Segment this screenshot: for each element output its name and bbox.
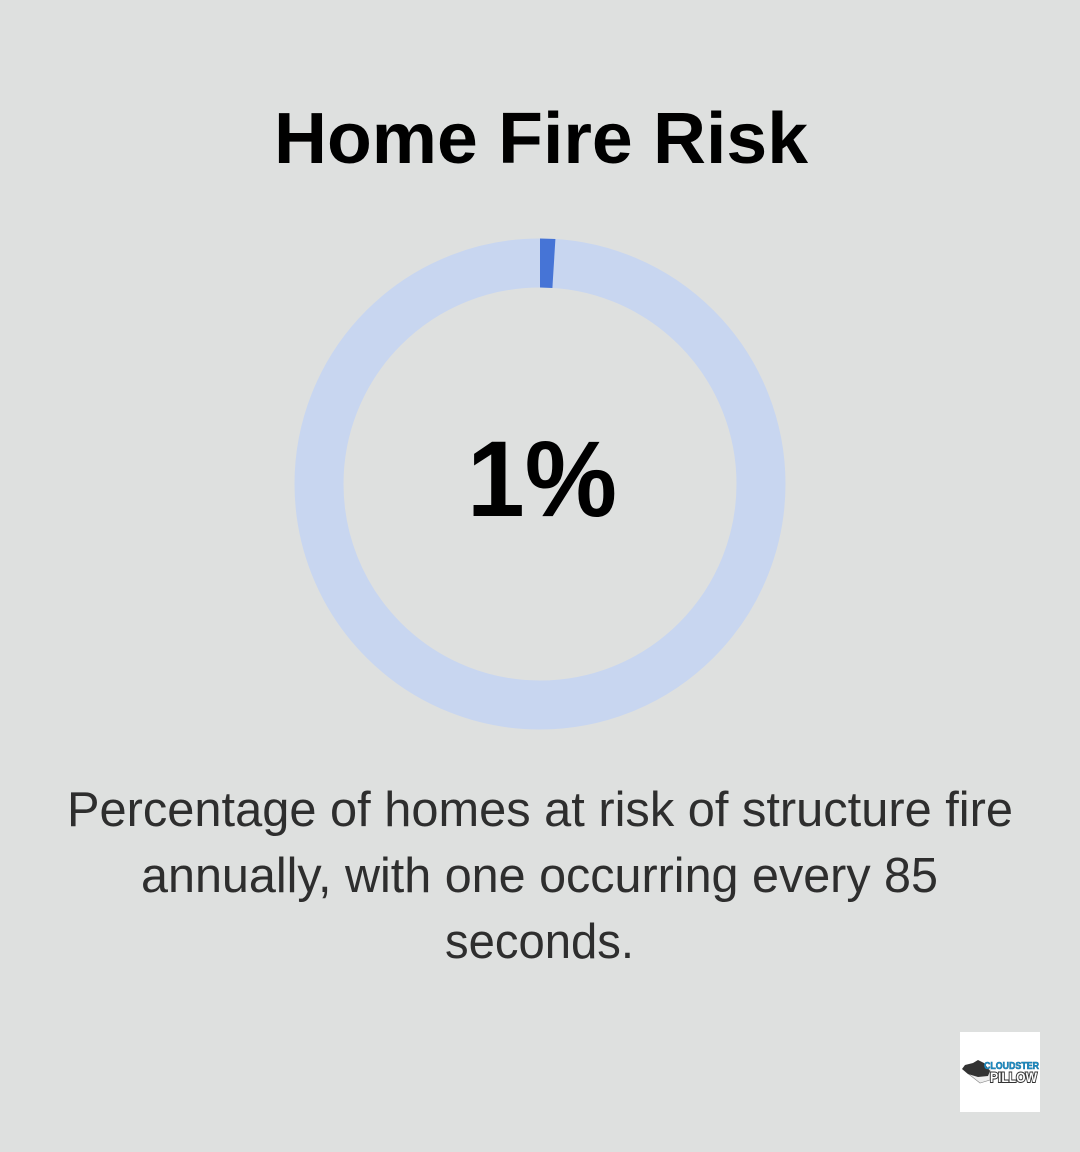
logo text: CLOUDSTER xyxy=(984,1061,1040,1072)
description text: Percentage of homes at risk of structure fire xyxy=(67,783,1013,837)
ring track xyxy=(319,263,761,705)
logo background xyxy=(960,1032,1040,1112)
donut chart: 1 percent xyxy=(319,238,761,705)
center value: 1% xyxy=(467,418,617,539)
logo: Cloudster Pillow: PILLOW xyxy=(990,1069,1038,1085)
logo: Cloudster Pillow xyxy=(960,1032,1040,1112)
title: Home Fire Risk xyxy=(274,99,809,179)
description text: seconds. xyxy=(445,915,634,969)
description text: annually, with one occurring every 85 xyxy=(141,849,938,903)
ring value segment xyxy=(540,238,555,288)
description text xyxy=(67,783,1013,969)
logo icon: pillow xyxy=(962,1060,990,1083)
